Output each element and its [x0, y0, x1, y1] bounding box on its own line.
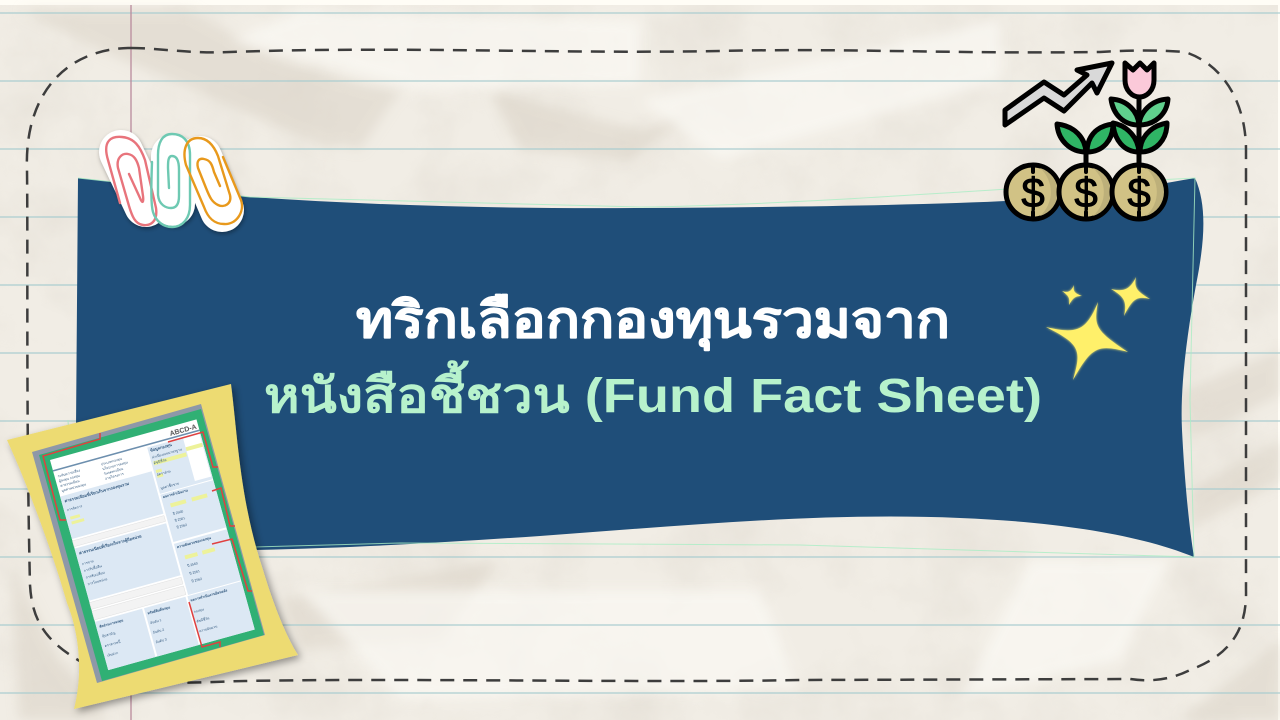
arrow trending up: [1005, 63, 1112, 125]
yellow paper: [7, 384, 298, 709]
red connector lines: [43, 432, 252, 647]
highlighted cells: [60, 443, 231, 586]
sheet small text: ผู้ลงทุน กองทุน: [58, 474, 81, 484]
sheet small text: ค่าเบี่ยงเบนมาตรฐาน: [151, 446, 183, 460]
coin 3: [1112, 165, 1166, 219]
sheet small text: เงินฝาก: [107, 651, 119, 658]
sheet small text: ปี 2562: [191, 576, 203, 584]
sheet small text: ตราสารหนี้: [104, 639, 122, 648]
white stripe rows: [72, 516, 186, 620]
sheet small text: ปี 2560: [172, 508, 184, 516]
sparkle large: [1046, 302, 1128, 380]
sheet small text: อายุโครงการ: [104, 471, 125, 482]
sheet small text: กองทุน: [193, 607, 205, 615]
sheet small text: ปี 2562: [176, 522, 188, 530]
title line 1: ทริกเลือกกองทุนรวมจาก: [356, 292, 950, 351]
coin 3: $: [1127, 169, 1151, 216]
sheet small text: การสับเปลี่ยน: [85, 569, 106, 580]
sheet small text: อันดับ 2: [152, 628, 165, 635]
coin 1: [1006, 165, 1060, 219]
coin 2: [1059, 165, 1113, 219]
sheet small text: ความผันผวน: [199, 624, 219, 633]
sheet small text: ผลการดำเนินงานย้อนหลัง: [190, 587, 228, 602]
sheet small text: ข้อมูลกองทุน: [149, 441, 173, 454]
coin 2: $: [1074, 169, 1098, 216]
sheet small text: ผลการดำเนินงาน: [162, 487, 189, 499]
clip: teal: [151, 134, 190, 227]
sheet small text: มูลค่าหน่วยลงทุน: [61, 482, 87, 494]
sheet page: [50, 419, 255, 670]
sheet small text: ดัชนีชี้วัด: [196, 615, 210, 624]
sheet small text: ความผันผวนของกองทุน: [176, 535, 212, 550]
banner: navy ribbon panel: [68, 178, 1203, 557]
sheet small text: การขาย: [81, 559, 94, 566]
illustration: fund fact sheet on yellow paper: [7, 384, 298, 709]
title line 2: หนังสือชี้ชวน (Fund Fact Sheet): [264, 360, 1042, 423]
icon: money growth plants and coins: [1005, 63, 1168, 219]
sheet small text: ปี 2560: [186, 560, 198, 568]
sheet small text: ทรัพย์สินที่ลงทุน: [147, 604, 171, 616]
sheet small text: ดัชนีชี้วัด: [153, 457, 167, 465]
upper leaves of right plant: [1111, 99, 1168, 125]
clip: red: [106, 137, 156, 225]
coin 1: $: [1021, 169, 1045, 216]
sheet small text: ปี 2561: [189, 568, 200, 576]
blue panels: [54, 433, 255, 670]
tulip flower: [1125, 63, 1154, 97]
green frame: [39, 409, 264, 681]
sheet small text: ปี 2561: [174, 515, 186, 523]
icon: sparkles: [1046, 277, 1150, 380]
sheet small text: มูลค่าซื้อขาย: [160, 480, 180, 490]
sheet small text: การรับซื้อคืน: [83, 563, 103, 573]
sheet small text: ค่าธรรมเนียม: [60, 478, 80, 488]
sheet small text: อัตราส่วน: [156, 469, 172, 477]
sheet small text: การจัดการ: [67, 504, 83, 512]
leaves of middle plant: [1057, 123, 1167, 152]
sheet small text: วันจดทะเบียน: [103, 466, 124, 476]
sheet small text: หุ้นสามัญ: [102, 631, 116, 639]
sticker backing: [121, 152, 222, 210]
sheet small text: [57, 437, 237, 659]
sparkle small: [1062, 285, 1082, 305]
stems: [1086, 95, 1139, 165]
sparkle medium: [1111, 277, 1150, 316]
sheet small text: ประเภทกองทุน: [101, 457, 123, 467]
sheet title: ABCD-A: [169, 424, 197, 438]
clip: orange: [184, 138, 242, 224]
sheet small text: นโยบายการลงทุน: [102, 459, 129, 472]
sheet small text: อันดับ 3: [155, 637, 167, 644]
sheet small text: อันดับ 1: [150, 618, 162, 625]
icon: paperclips sticker: [106, 134, 242, 227]
grey frame: [32, 404, 265, 683]
sheet small text: ระดับความเสี่ยง: [57, 467, 81, 478]
sheet small text: ค่าธรรมเนียมที่เรียกเก็บจากผู้ถือหน่วย: [78, 532, 143, 557]
sheet small text: การโอนหน่วย: [87, 576, 108, 586]
title: two-line heading: [264, 292, 1042, 423]
sheet small text: สัดส่วนการลงทุน: [99, 617, 125, 630]
sheet small text: ค่าธรรมเนียมที่เรียกเก็บจากกองทุนรวม: [64, 480, 130, 504]
